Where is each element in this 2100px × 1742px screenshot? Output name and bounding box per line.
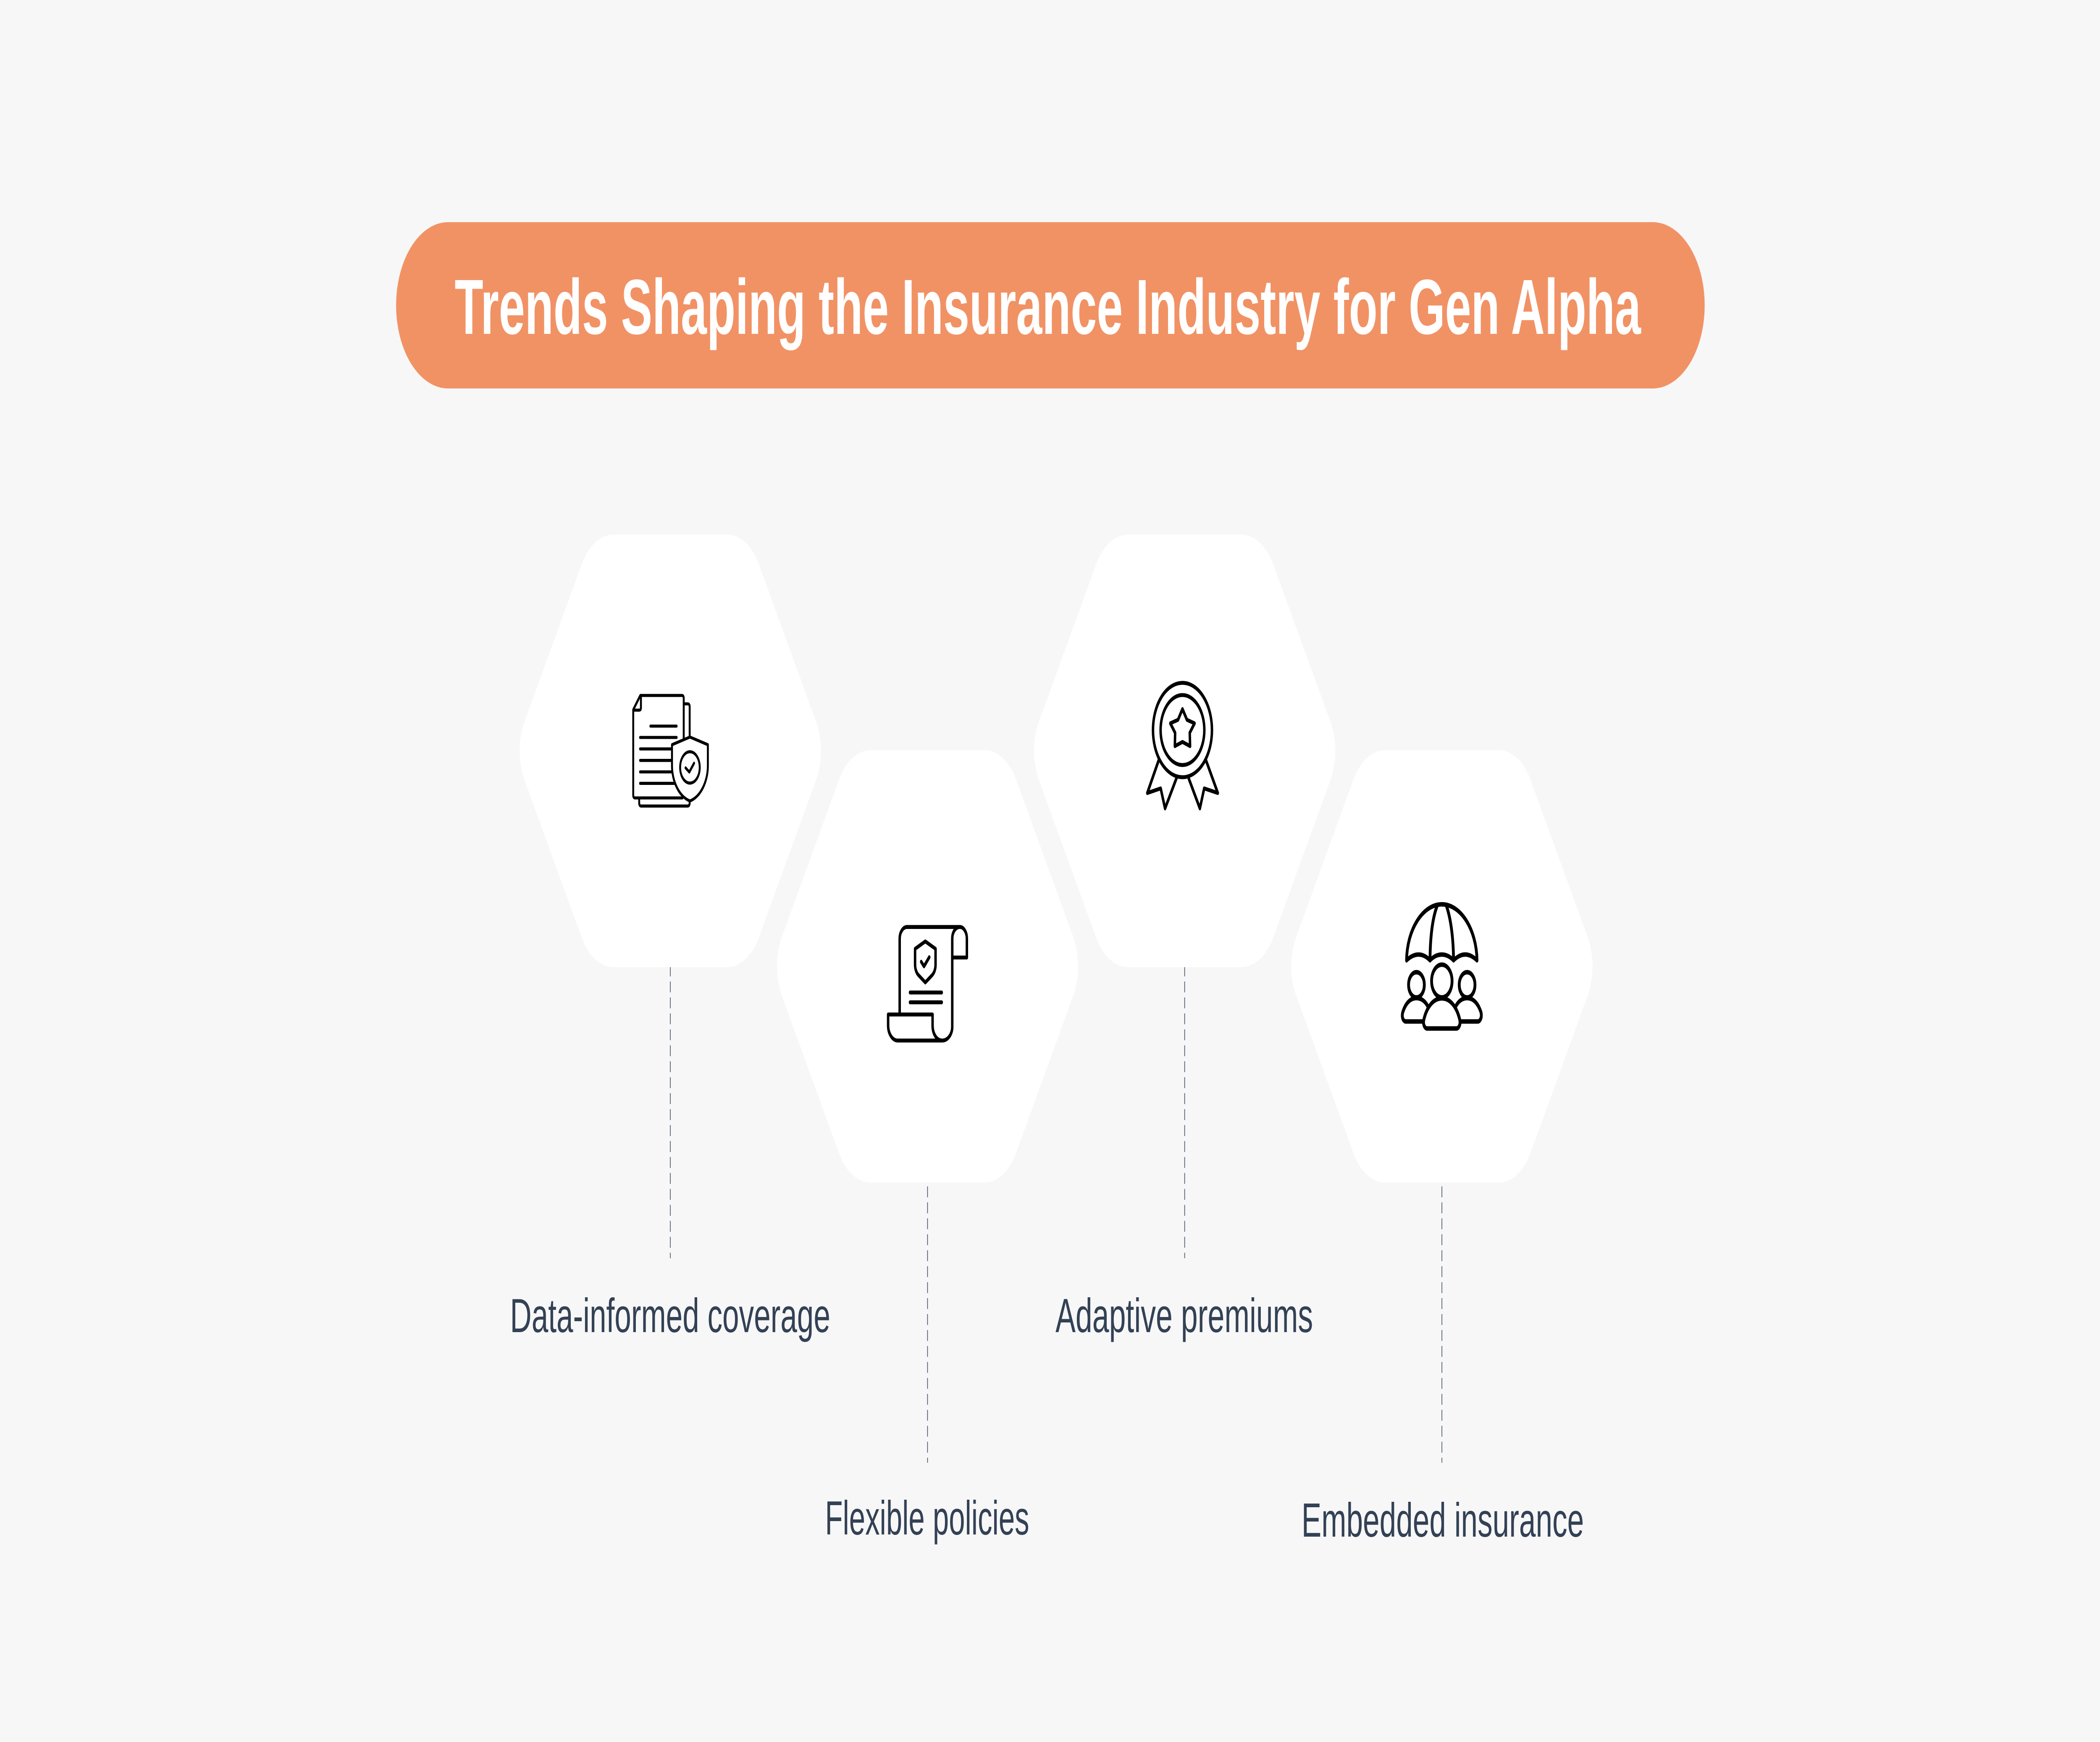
icon: document with shield xyxy=(633,695,708,806)
panel: data-informed coverage xyxy=(510,535,830,1343)
title pill xyxy=(396,222,1705,388)
panel: embedded insurance xyxy=(1292,750,1593,1547)
title text: Trends Shaping the Insurance Industry for Gen Alpha xyxy=(454,263,1641,351)
connector line 3 xyxy=(1184,965,1185,1258)
hexagon 1 xyxy=(520,535,821,967)
icon: umbrella over people xyxy=(1402,904,1481,1028)
label 1: Data-informed coverage xyxy=(510,1289,830,1343)
connector line 1 xyxy=(670,965,671,1258)
icon: award ribbon with star xyxy=(1147,683,1218,808)
title banner xyxy=(396,222,1705,388)
connector line 4 xyxy=(1441,1186,1442,1463)
label 3: Adaptive premiums xyxy=(1055,1289,1313,1343)
icon: policy scroll with shield xyxy=(888,927,967,1041)
connector line 2 xyxy=(927,1186,928,1463)
panel: adaptive premiums xyxy=(1034,535,1335,1343)
panel: flexible policies xyxy=(777,750,1078,1545)
hexagon 2 xyxy=(777,750,1078,1183)
label 2: Flexible policies xyxy=(825,1492,1029,1545)
hexagon 4 xyxy=(1292,750,1593,1183)
label 4: Embedded insurance xyxy=(1302,1494,1584,1547)
hexagon 3 xyxy=(1034,535,1335,967)
